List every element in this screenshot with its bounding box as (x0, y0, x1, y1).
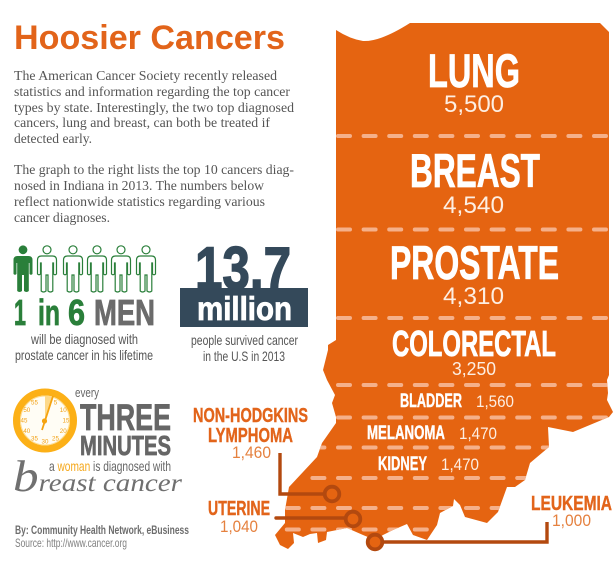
icon: stopwatch clock: 50 (23, 407, 31, 414)
caption: men statistic: prostate cancer in his lifetime (15, 347, 153, 363)
map label: melanoma: MELANOMA (367, 422, 445, 444)
caption: men statistic: will be diagnosed with (30, 331, 138, 347)
caption: a woman is diagnosed with: a woman is diagnosed with (49, 458, 171, 474)
stat: 13.7 million: 13.7 (195, 235, 291, 302)
map label: breast: BREAST (410, 144, 540, 197)
icon: stopwatch clock: 55 (31, 399, 38, 406)
icon: stopwatch clock (16, 392, 74, 449)
map label: bladder: BLADDER (400, 390, 462, 412)
stat: every three minutes (75, 385, 171, 461)
script text: breast cancer: breast cancer (13, 452, 182, 501)
map label: kidney: KIDNEY (378, 453, 427, 475)
icon: stopwatch clock: 10 (60, 407, 67, 414)
stat: 1 in 6 men: MEN (94, 292, 155, 333)
intro text block: cancer diagnoses. (14, 210, 110, 225)
map label: breast (410, 144, 540, 219)
map label: lung: 5,500 (444, 91, 504, 118)
map: Indiana state shape (275, 23, 613, 549)
icon: stopwatch clock: 20 (60, 428, 67, 435)
icon: stopwatch clock: 25 (52, 436, 59, 443)
connector: lymphoma (280, 453, 339, 501)
label: non-hodgkins lymphoma: NON-HODGKINS (193, 405, 308, 427)
label: uterine: 1,040 (220, 517, 258, 536)
intro text block: types by state. Interestingly, the two top diagnosed (14, 100, 294, 115)
label: non-hodgkins lymphoma (193, 405, 308, 462)
caption: survivors statistic: in the U.S in 2013 (203, 348, 285, 364)
map label: breast: 4,540 (443, 192, 504, 219)
icon: row of six men (14, 245, 156, 292)
label: non-hodgkins lymphoma: LYMPHOMA (208, 425, 293, 447)
label: leukemia (531, 493, 612, 530)
label: uterine: UTERINE (208, 498, 270, 520)
stat: 1 in 6 men: in (38, 292, 60, 333)
stat: every three minutes: MINUTES (80, 430, 171, 461)
caption: men statistic (15, 331, 153, 363)
label: uterine (208, 498, 270, 536)
stat: 1 in 6 men: 6 (68, 292, 85, 333)
map label: lung (428, 44, 520, 118)
map label: kidney: 1,470 (441, 455, 479, 474)
stat: 13.7 million (180, 235, 308, 327)
connector: uterine (276, 512, 360, 526)
icon: stopwatch clock: 5 (54, 399, 58, 406)
map label: prostate: 4,310 (443, 283, 504, 310)
intro text block (14, 68, 294, 225)
dashed dividers (287, 136, 612, 530)
icon: stopwatch clock: 30 (42, 438, 49, 446)
map label: melanoma: 1,470 (459, 424, 497, 443)
intro text block: nosed in Indiana in 2013. The numbers below (14, 178, 264, 193)
credits: By: Community Health Network, eBusiness (15, 523, 189, 537)
map label: lung: LUNG (428, 44, 520, 97)
icon: stopwatch clock: 45 (21, 418, 28, 424)
icon: stopwatch clock: 35 (31, 436, 38, 443)
stat: 1 in 6 men (14, 292, 155, 333)
intro text block: statistics and information regarding the top cancer (14, 84, 291, 99)
credits: Source: http://www.cancer.org (15, 536, 127, 550)
stat: 1 in 6 men: 1 (14, 292, 26, 333)
credits (15, 523, 189, 550)
stat: every three minutes: THREE (80, 397, 171, 438)
label: leukemia: 1,000 (552, 511, 591, 530)
caption: survivors statistic (191, 332, 298, 364)
intro text block: reflect nationwide statistics regarding various (14, 194, 265, 209)
map label: colorectal (392, 323, 556, 379)
label: non-hodgkins lymphoma: 1,460 (232, 443, 271, 462)
icon: stopwatch clock: 15 (63, 418, 70, 424)
title: Hoosier Cancers (14, 19, 285, 57)
map label: bladder: 1,560 (476, 392, 514, 411)
intro text block: detected early. (14, 131, 92, 146)
stat: 13.7 million: million (197, 290, 292, 327)
connector: leukemia (368, 522, 547, 549)
stat: every three minutes: every (75, 385, 99, 400)
intro text block: cancers, lung and breast, can both be treated if (14, 115, 271, 130)
intro text block: The graph to the right lists the top 10 cancers diag- (14, 162, 294, 177)
map label: colorectal: 3,250 (452, 359, 496, 379)
icon: stopwatch clock: 40 (23, 428, 31, 435)
map label: prostate (390, 236, 559, 310)
intro text block: The American Cancer Society recently released (14, 68, 277, 83)
caption: survivors statistic: people survived cancer (191, 332, 298, 348)
